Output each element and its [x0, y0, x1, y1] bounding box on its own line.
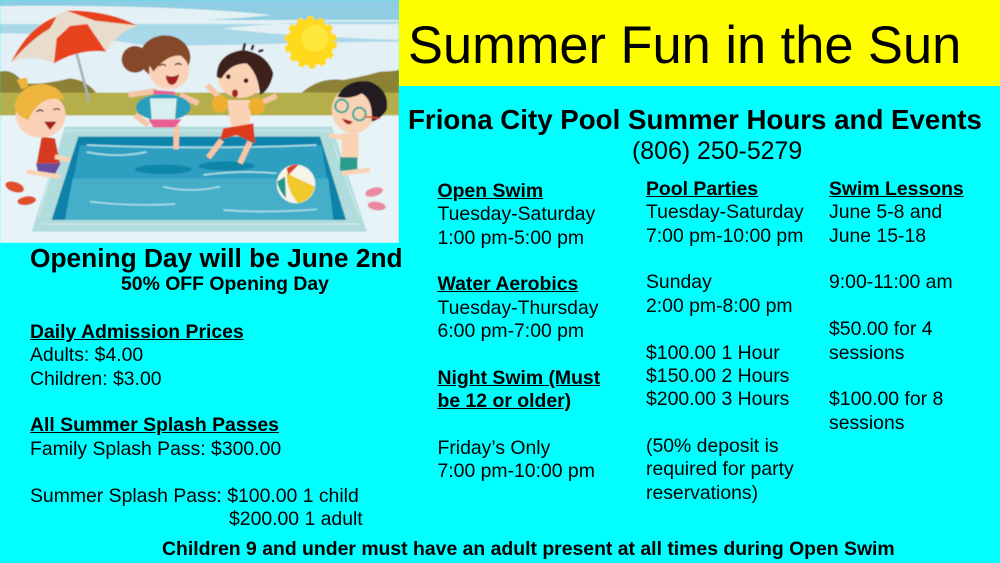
panel: pool parties: $100.00 1 Hour — [646, 342, 780, 364]
panel: swim lessons: $100.00 for 8 — [829, 388, 943, 410]
panel: open swim, water aerobics, night swim: Tuesday-Thursday — [438, 297, 598, 319]
panel: swim lessons — [829, 178, 964, 434]
umbrella — [70, 28, 89, 102]
panel: admission prices and passes: Summer Splash Pass: $100.00 1 child — [30, 485, 359, 507]
panel: pool parties — [646, 178, 804, 504]
panel: pool parties: 7:00 pm-10:00 pm — [646, 225, 803, 247]
panel: admission prices and passes: All Summer Splash Passes — [30, 414, 279, 436]
panel: pool parties: reservations) — [646, 482, 758, 504]
illustration: children playing at a swimming pool — [0, 0, 399, 243]
panel: open swim, water aerobics, night swim: 1:00 pm-5:00 pm — [438, 227, 584, 249]
panel: admission prices and passes: Daily Admission Prices — [30, 321, 244, 343]
panel: admission prices and passes: Children: $3.00 — [30, 368, 162, 390]
title text: Summer Fun in the Sun — [408, 17, 961, 75]
panel: admission prices and passes — [30, 273, 363, 530]
flip-flops — [4, 179, 25, 195]
panel: open swim, water aerobics, night swim — [438, 180, 600, 482]
panel: pool parties: required for party — [646, 458, 794, 480]
panel: open swim, water aerobics, night swim: 6:00 pm-7:00 pm — [438, 320, 584, 342]
opening day heading: Opening Day will be June 2nd — [30, 243, 403, 273]
panel: pool parties: Sunday — [646, 271, 712, 293]
panel: swim lessons: sessions — [829, 342, 904, 364]
panel: swim lessons: $50.00 for 4 — [829, 318, 932, 340]
panel: swim lessons: 9:00-11:00 am — [829, 271, 953, 293]
pool deck and water — [32, 127, 367, 232]
phone number: (806) 250-5279 — [632, 137, 802, 165]
panel: admission prices and passes: $200.00 1 adult — [229, 508, 363, 530]
panel: pool parties: Tuesday-Saturday — [646, 201, 804, 223]
panel: open swim, water aerobics, night swim: Tuesday-Saturday — [438, 203, 595, 225]
beach ball — [277, 165, 315, 203]
title banner — [399, 0, 1000, 86]
panel: open swim, water aerobics, night swim: Open Swim — [438, 180, 543, 202]
main heading: Friona City Pool Summer Hours and Events — [408, 104, 982, 135]
boy with armbands — [207, 85, 277, 163]
panel: open swim, water aerobics, night swim: be 12 or older) — [438, 390, 571, 412]
panel: swim lessons: June 5-8 and — [829, 201, 942, 223]
panel: admission prices and passes: Adults: $4.00 — [30, 344, 143, 366]
panel: admission prices and passes: 50% OFF Opening Day — [121, 273, 329, 295]
panel: open swim, water aerobics, night swim: Water Aerobics — [438, 273, 578, 295]
sun — [287, 19, 334, 66]
panel: pool parties: $200.00 3 Hours — [646, 388, 789, 410]
panel: pool parties: Pool Parties — [646, 178, 758, 200]
girl in float — [128, 91, 198, 149]
panel: pool parties: $150.00 2 Hours — [646, 365, 789, 387]
panel: swim lessons: Swim Lessons — [829, 178, 964, 200]
panel: open swim, water aerobics, night swim: Night Swim (Must — [438, 367, 600, 389]
blonde child — [37, 137, 60, 163]
panel: pool parties: 2:00 pm-8:00 pm — [646, 295, 793, 317]
panel: open swim, water aerobics, night swim: 7:00 pm-10:00 pm — [438, 460, 595, 482]
panel: admission prices and passes: Family Splash Pass: $300.00 — [30, 438, 281, 460]
panel: swim lessons: sessions — [829, 412, 904, 434]
panel: swim lessons: June 15-18 — [829, 225, 926, 247]
panel: open swim, water aerobics, night swim: Friday’s Only — [438, 437, 550, 459]
boy with glasses — [342, 133, 358, 160]
panel: pool parties: (50% deposit is — [646, 435, 779, 457]
footer note: Children 9 and under must have an adult present at all times during Open Swim — [162, 538, 895, 560]
